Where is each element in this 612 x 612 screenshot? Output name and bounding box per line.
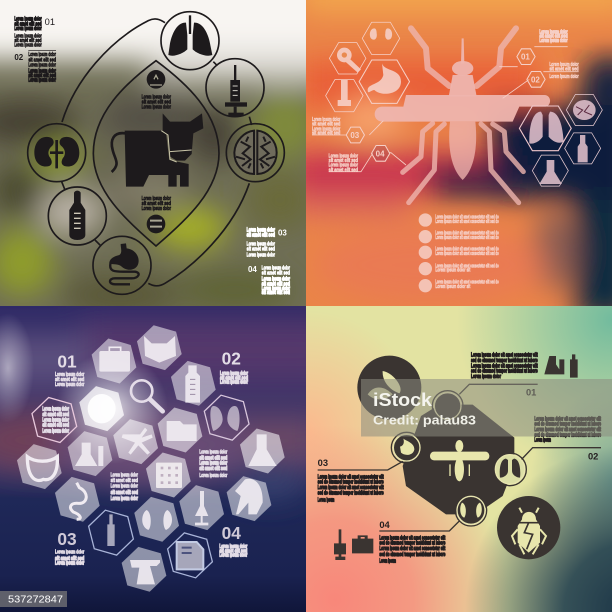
hexagon cluster text blocks and numbers: 01 [57, 352, 77, 372]
hexagon filled tiles [11, 322, 290, 595]
icon: brain [234, 131, 277, 175]
panel 1 blurred background [0, 0, 306, 306]
dense text blocks and numbers: 01 [526, 387, 536, 397]
callouts 01 to 04 with connectors: Lorem ipsum dolor [549, 74, 579, 80]
hexagon cluster text blocks and numbers: Lorem ipsum dolor [111, 496, 138, 502]
hexagon cluster text blocks and numbers [42, 349, 248, 567]
dense text blocks and numbers: Lorem ipsum [534, 438, 551, 444]
leaf small icons and labels: sit amet elit sed [142, 201, 171, 207]
text block 01 and 02: Lorem ipsum dolor [28, 69, 56, 75]
hexagon cluster text blocks and numbers: sit amet elit sed [55, 377, 84, 383]
hexagon cluster text blocks and numbers: 02 [222, 349, 241, 369]
hexagon cluster text blocks and numbers: Lorem ipsum dolor [55, 561, 84, 567]
hexagon cluster text blocks and numbers: sit amet elit sed [42, 423, 69, 429]
panel: mosquito infographic: Lorem ipsum dolor sit amet consectetur elit sed do [435, 247, 499, 253]
icon: mosquito [430, 440, 489, 481]
watermark banner: iStock credit: iStock [373, 390, 433, 410]
panel: cow disease infographic [0, 0, 306, 306]
text block 03 and 04: Lorem ipsum dolor [247, 227, 275, 233]
callouts 01 to 04 with connectors [312, 29, 579, 173]
icon: stomach and intestine [109, 243, 139, 284]
text block 01 and 02: 01 [45, 17, 55, 27]
callouts 01 to 04 with connectors: 04 [376, 149, 385, 158]
callouts 01 to 04 with connectors: sit amet elit sed [539, 34, 568, 40]
dense text blocks and numbers: sed do eiusmod tempor incididunt ut labore [379, 541, 445, 547]
dense text blocks and numbers: Lorem ipsum dolor sit amet consectetur elit [471, 363, 538, 369]
dense text blocks and numbers: sed do eiusmod tempor incididunt ut labore [471, 358, 538, 364]
hexagon cluster text blocks and numbers: sit amet elit sed [111, 478, 138, 484]
leaf small icons and labels: Lorem ipsum dolor [142, 196, 171, 202]
watermark banner: iStock credit [361, 379, 612, 436]
dense text blocks and numbers: Lorem ipsum dolor sit amet consectetur elit [379, 535, 445, 541]
text block 03 and 04: Lorem ipsum dolor [247, 241, 275, 247]
icon: cow [112, 113, 203, 187]
text block 03 and 04: Lorem ipsum dolor [262, 286, 290, 292]
panel: mosquito infographic: Lorem ipsum dolor sit amet consectetur elit sed do [435, 235, 499, 241]
dense text blocks and numbers: Lorem ipsum [318, 498, 334, 504]
watermark: image id: 537272847 [8, 594, 63, 606]
text block 01 and 02: sit amet elit sed [14, 21, 42, 27]
icon: leaf shapes in stomach circle [383, 371, 401, 393]
hexagon cluster text blocks and numbers: 04 [222, 523, 241, 543]
dense text blocks and numbers [318, 353, 601, 565]
leaf small icons and labels [142, 70, 171, 233]
dense text blocks and numbers: Lorem ipsum dolor sit amet consectetur elit [471, 353, 538, 359]
text block 01 and 02: Lorem ipsum dolor [28, 52, 56, 58]
hexagon cluster text blocks and numbers: sit amet elit sed [199, 455, 227, 461]
bullet list with five icons: Lorem ipsum dolor sit [435, 268, 470, 274]
text block 01 and 02: Lorem ipsum dolor [14, 26, 42, 32]
panel: mosquito infographic: Lorem ipsum dolor sit amet consectetur elit sed do [435, 280, 499, 286]
hexagon cluster text blocks and numbers: Lorem ipsum dolor [42, 429, 69, 435]
panel: mosquito infographic: Lorem ipsum dolor sit amet consectetur elit sed do [435, 251, 499, 257]
icon: lungs [168, 15, 212, 56]
hexagon cluster text blocks and numbers: Lorem ipsum dolor [42, 407, 69, 413]
hexagon cluster text blocks and numbers: Lorem ipsum dolor [219, 553, 247, 559]
dense text blocks and numbers: sed do eiusmod tempor incididunt ut labore [318, 490, 384, 496]
dense text blocks and numbers: Lorem ipsum dolor sit amet consectetur elit [318, 485, 384, 491]
dense text blocks and numbers: Lorem ipsum dolor [471, 374, 501, 380]
hexagon cluster text blocks and numbers: Lorem ipsum dolor [199, 449, 227, 455]
text block 03 and 04: 04 [248, 265, 257, 274]
hexagon cluster text blocks and numbers: Lorem ipsum dolor [42, 417, 69, 423]
text block 01 and 02: sit amet elit sed [28, 57, 56, 63]
panel: pastel mosquito infographic [306, 306, 612, 612]
dense text blocks and numbers: 02 [588, 451, 598, 461]
callouts 01 to 04 with connectors: 02 [531, 75, 540, 84]
text block 03 and 04: Lorem ipsum dolor [262, 277, 290, 283]
panel 3 blurred background [0, 306, 330, 612]
hexagon cluster text blocks and numbers: sit amet elit sed [199, 466, 227, 472]
callouts 01 to 04 with connectors: 03 [350, 131, 360, 140]
text block 03 and 04 [247, 227, 290, 296]
text block 03 and 04: sit amet elit sed [262, 271, 290, 277]
hexagon cluster text blocks and numbers: sit amet elit sed [111, 490, 138, 496]
text block 03 and 04: Lorem ipsum dolor [247, 253, 275, 259]
dense text blocks and numbers: Lorem ipsum dolor sit amet consectetur elit [318, 474, 384, 480]
hexagon cluster text blocks and numbers: Lorem ipsum dolor [199, 473, 227, 479]
hexagon cluster text blocks and numbers: Lorem ipsum dolor [220, 379, 248, 385]
panel: mosquito infographic [290, 0, 612, 320]
hexagon cluster text blocks and numbers: Lorem ipsum dolor [219, 544, 247, 550]
hexagon cluster text blocks and numbers: Lorem ipsum dolor [55, 382, 84, 388]
text block 03 and 04: Lorem ipsum dolor [262, 265, 290, 271]
hexagon cluster right with lungs brain bottle flask [519, 94, 602, 186]
callouts 01 to 04 with connectors: sit amet elit sed [329, 167, 358, 173]
dense text blocks and numbers: Lorem ipsum [379, 559, 396, 565]
dense text blocks and numbers: 04 [379, 520, 391, 530]
text block 01 and 02: Lorem ipsum dolor [28, 63, 56, 69]
bullet list with five icons: Lorem ipsum dolor sit [435, 284, 470, 290]
watermark: image id [0, 591, 67, 607]
panel: mosquito infographic: Lorem ipsum dolor sit amet consectetur elit sed do [435, 263, 499, 269]
icon: lung in ring [500, 459, 520, 478]
icons: flasks and bottle [544, 354, 578, 378]
text block 03 and 04: 03 [278, 228, 287, 237]
dense text blocks and numbers: 03 [318, 458, 328, 468]
hexagon cluster text blocks and numbers: sit amet elit sed [42, 412, 69, 418]
panel: mosquito infographic: Lorem ipsum dolor sit amet consectetur elit sed do [435, 214, 499, 220]
callouts 01 to 04 with connectors: Lorem ipsum dolor [549, 62, 579, 68]
callouts 01 to 04 with connectors: Lorem ipsum dolor [329, 153, 358, 159]
panel: hexagon medical icons infographic [0, 306, 330, 612]
callouts 01 to 04 with connectors: Lorem ipsum dolor [329, 163, 358, 169]
text block 01 and 02: Lorem ipsum dolor [14, 43, 42, 49]
icon: syringe [225, 65, 247, 116]
hexagon cluster text blocks and numbers: sit amet elit sed [55, 556, 84, 562]
text block 03 and 04: sit amet elit sed [262, 290, 290, 296]
leaf outline around cow [93, 61, 219, 246]
leaf small icons and labels: Lorem ipsum dolor [142, 105, 171, 111]
hexagon cluster text blocks and numbers: Lorem ipsum dolor [111, 483, 138, 489]
icon: beetle [512, 508, 546, 554]
hexagon cluster text blocks and numbers: Lorem ipsum dolor [55, 372, 84, 378]
hexagon cluster left with kidney key stomach syringe [326, 22, 410, 112]
watermark banner: iStock credit: Credit: palau83 [373, 414, 476, 428]
panel: mosquito infographic: Lorem ipsum dolor sit amet consectetur elit sed do [435, 231, 499, 237]
callouts 01 to 04 with connectors: Lorem ipsum dolor [539, 29, 568, 35]
leaf small icons and labels: Lorem ipsum dolor [142, 95, 171, 101]
hexagon cluster text blocks and numbers: sit amet elit sed [219, 548, 247, 554]
callouts 01 to 04 with connectors: Lorem ipsum dolor [539, 38, 568, 44]
hexagon outlined tiles [26, 392, 255, 581]
dense text blocks and numbers: sed do eiusmod tempor incididunt ut labore [379, 552, 445, 558]
dense text blocks and numbers: Lorem ipsum dolor sit amet consectetur elit [379, 546, 445, 552]
callouts 01 to 04 with connectors: Lorem ipsum dolor [312, 126, 340, 132]
text block 03 and 04: sit amet elit sed [247, 233, 275, 239]
hexagon cluster text blocks and numbers: Lorem ipsum dolor [199, 461, 227, 467]
hexagon cluster text blocks and numbers: Lorem ipsum dolor [220, 371, 248, 377]
hexagon cluster text blocks and numbers: 03 [57, 529, 77, 549]
hexagon cluster text blocks and numbers: Lorem ipsum dolor [55, 549, 84, 555]
callouts 01 to 04 with connectors: sit amet elit sed [312, 131, 340, 137]
icon: kidneys [34, 137, 79, 168]
icon: bottle thermometer [69, 191, 85, 240]
callouts 01 to 04 with connectors: sit amet elit sed [329, 158, 358, 164]
icon: mosquito [375, 28, 550, 203]
text block 01 and 02: Lorem ipsum dolor [14, 33, 42, 39]
callouts 01 to 04 with connectors: sit amet elit sed [312, 122, 340, 128]
text block 01 and 02: sit amet elit sed [14, 38, 42, 44]
text block 01 and 02: Lorem ipsum dolor [28, 77, 56, 83]
hexagon icons [27, 336, 277, 584]
callouts 01 to 04 with connectors: Lorem ipsum dolor [312, 117, 340, 123]
mosquito badge with rings and connectors [318, 354, 601, 560]
text block 01 and 02: 02 [14, 53, 24, 62]
hexagon cluster text blocks and numbers: Lorem ipsum dolor [111, 473, 138, 479]
text block 01 and 02: Lorem ipsum dolor [14, 17, 42, 23]
text block 01 and 02 [14, 17, 56, 83]
text block 01 and 02: sit amet elit sed [28, 73, 56, 79]
callouts 01 to 04 with connectors: 01 [521, 53, 530, 62]
text block 03 and 04: sit amet elit sed [262, 281, 290, 287]
dense text blocks and numbers: sed do eiusmod tempor incididunt ut labore [471, 369, 538, 375]
text block 03 and 04: sit amet elit sed [247, 247, 275, 253]
panel 4 gradient background [306, 306, 612, 612]
icons: syringe and briefcase [334, 529, 373, 560]
bullet list with five icons [419, 213, 499, 292]
panel: mosquito infographic: Lorem ipsum dolor sit amet consectetur elit sed do [435, 219, 499, 225]
dense text blocks and numbers: sed do eiusmod tempor incididunt ut labore [318, 480, 384, 486]
callouts 01 to 04 with connectors: sit amet elit sed [549, 67, 579, 73]
outer connecting curves and rings [28, 12, 284, 294]
panel 2 blurred background [290, 0, 612, 320]
leaf small icons and labels: sit amet elit sed [142, 100, 171, 106]
hexagon cluster text blocks and numbers: sit amet elit sed [220, 375, 248, 381]
leaf small icons and labels: Lorem ipsum dolor [142, 206, 171, 212]
